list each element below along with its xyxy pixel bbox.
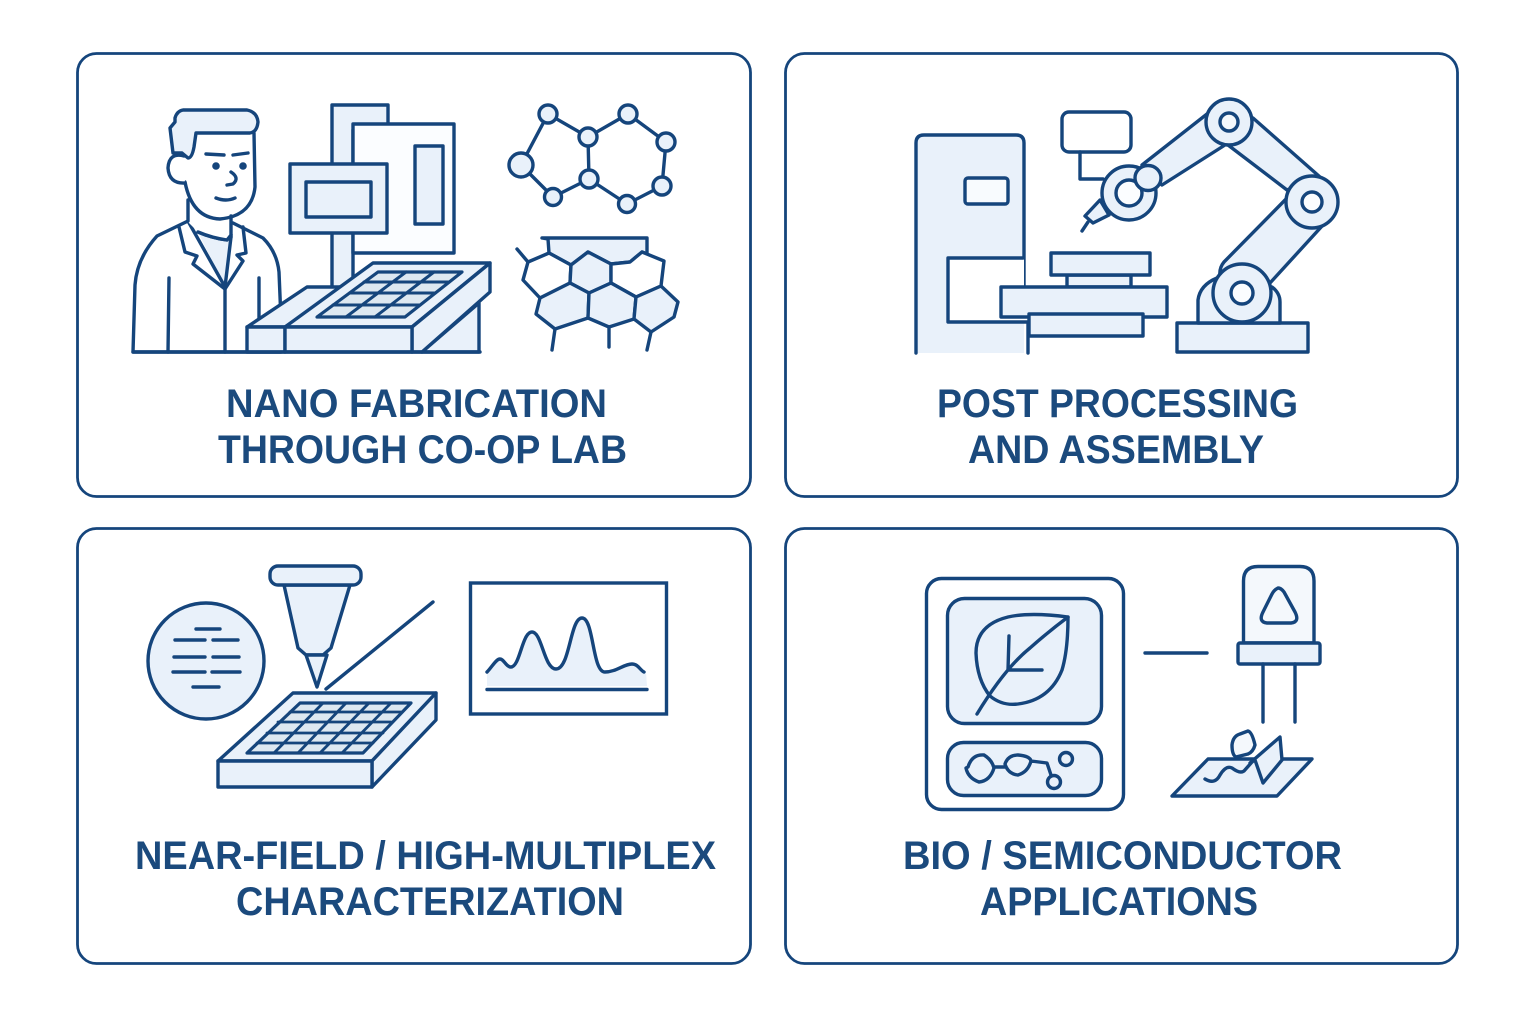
heading: bio / semiconductor: APPLICATIONS <box>980 880 1258 924</box>
illustration: fabrication machine <box>133 105 490 352</box>
panel: near-field characterization <box>78 528 750 964</box>
illustration: controller box <box>1062 112 1131 179</box>
icon: substrate with sample <box>1172 731 1312 796</box>
panel: post processing <box>786 54 1458 496</box>
heading: nano fabrication: NANO FABRICATION <box>226 382 607 426</box>
heading: post processing <box>937 382 1298 472</box>
icon: molecule network <box>509 105 675 212</box>
heading: near-field <box>135 834 716 924</box>
icon: hexagonal lattice <box>517 238 678 350</box>
heading: post processing: POST PROCESSING <box>937 382 1298 426</box>
heading: nano fabrication: THROUGH CO-OP LAB <box>218 428 627 472</box>
heading: nano fabrication <box>218 382 627 472</box>
icon: sensor chip grid <box>218 693 436 787</box>
illustration: stacked slabs <box>1001 253 1167 336</box>
illustration: process cabinet <box>916 135 1028 353</box>
connector line <box>1145 651 1207 655</box>
heading: post processing: AND ASSEMBLY <box>968 428 1264 472</box>
icon: LED component <box>1238 566 1320 722</box>
heading: near-field: CHARACTERIZATION <box>236 880 624 924</box>
icon: bio device with leaf <box>926 578 1124 810</box>
heading: near-field: NEAR-FIELD / HIGH-MULTIPLEX <box>135 834 716 878</box>
illustration: robot arm <box>1082 99 1338 352</box>
heading: bio / semiconductor <box>903 834 1342 924</box>
heading: bio / semiconductor: BIO / SEMICONDUCTOR <box>903 834 1342 878</box>
chart: spectrum peaks <box>470 583 666 714</box>
icon: probe tip <box>270 566 433 689</box>
icon: circular sample view <box>148 603 264 719</box>
panel: bio and semiconductor applications <box>786 528 1458 964</box>
panel: nano fabrication <box>78 54 750 496</box>
illustration: scientist in lab coat <box>133 110 281 352</box>
